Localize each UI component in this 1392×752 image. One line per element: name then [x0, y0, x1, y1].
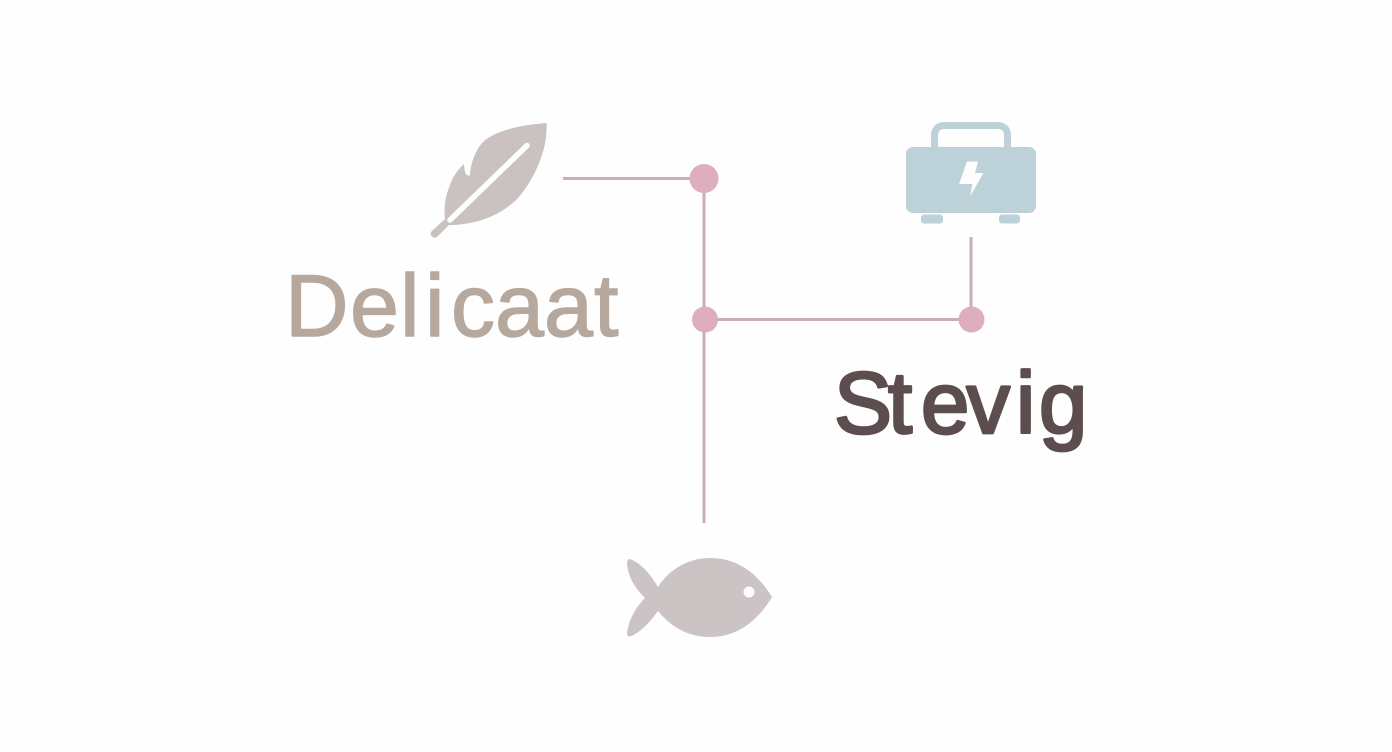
icon: lightning bolt [959, 162, 984, 196]
icon: battery case [906, 126, 1036, 224]
connector lines [563, 178, 971, 523]
node: right junction [958, 306, 984, 332]
icon: fish [627, 558, 772, 637]
label: Stevig: Stevig [834, 355, 1087, 452]
icon: feather [431, 123, 547, 238]
fish eye [744, 586, 754, 598]
node: middle junction [692, 306, 718, 332]
label: Delicaat: Delicaat [285, 256, 618, 355]
node: top junction [690, 164, 718, 193]
